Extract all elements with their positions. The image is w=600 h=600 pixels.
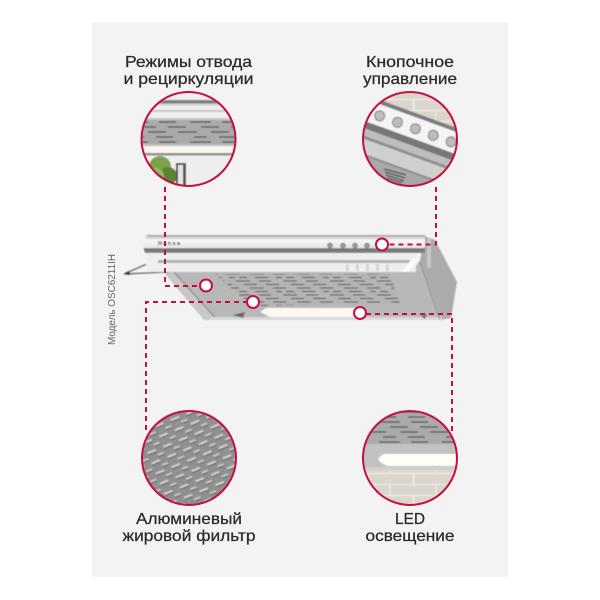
dashed connector: LED [366, 314, 452, 432]
flap arm [124, 260, 168, 274]
heading: aluminium grease filter: Алюминевый [136, 511, 242, 528]
heading: push-button control: управление [363, 71, 457, 88]
hood underside body [165, 260, 442, 320]
heading: LED lighting: освещение [366, 528, 455, 545]
dashed connector: filter [146, 302, 248, 433]
hood side panel [420, 236, 457, 320]
circle detail: aluminium filter [142, 411, 236, 505]
dashed connector: modes [165, 187, 201, 286]
circle detail: LED lamp [360, 408, 460, 508]
marker dot: filter [247, 296, 259, 308]
heading: LED lighting [366, 511, 455, 545]
heading: push-button control [363, 54, 457, 88]
range hood product image [124, 235, 457, 320]
marker dot: buttons [376, 238, 388, 250]
mounting clip [233, 312, 245, 318]
heading: aluminium grease filter: жировой фильтр [122, 528, 256, 545]
front panel [143, 235, 425, 253]
heading: exhaust and recirculation modes: и рециркуляции [124, 71, 254, 88]
brand logo: Hansa [158, 241, 181, 247]
circle detail: modes [140, 90, 238, 188]
lower front rail [146, 252, 416, 272]
heading: aluminium grease filter [122, 511, 256, 545]
background panel [92, 22, 508, 577]
marker dot: modes [200, 280, 212, 292]
button row [374, 110, 456, 148]
heading: push-button control: Кнопочное [366, 54, 454, 71]
control buttons [327, 243, 370, 248]
heading: exhaust and recirculation modes [124, 54, 254, 88]
marker dot: LED [354, 307, 366, 319]
vertical model label: Модель OSC6211IH [107, 254, 118, 345]
vent slots [346, 264, 389, 271]
lamp [260, 308, 362, 317]
dashed connector: buttons [388, 187, 436, 244]
circle detail: buttons [362, 91, 458, 187]
heading: exhaust and recirculation modes: Режимы отвода [125, 54, 252, 71]
grease filter grille [215, 274, 400, 306]
heading: LED lighting: LED [395, 511, 425, 528]
